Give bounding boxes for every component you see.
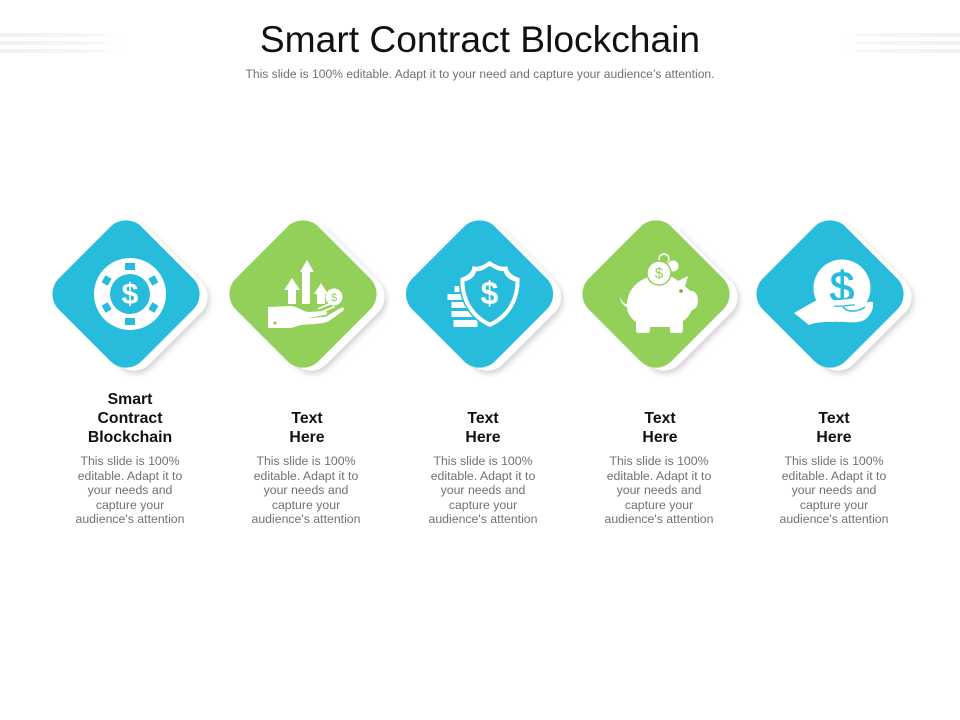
panel 4 diamond: piggy bank icon bbox=[573, 211, 749, 383]
heading 4: Text bbox=[644, 410, 676, 427]
panel 3 diamond: shield icon bbox=[397, 211, 572, 383]
text block 2: This slide is 100% bbox=[256, 454, 356, 468]
text block 4: audience's attention bbox=[604, 512, 714, 526]
text block 3: audience's attention bbox=[428, 512, 538, 526]
heading 1: Blockchain bbox=[88, 429, 172, 446]
text block 4: capture your bbox=[625, 498, 693, 512]
icon: hand and dollar coin bbox=[794, 260, 873, 325]
icon: shield and coin stack: $ bbox=[481, 275, 499, 311]
text block 5: capture your bbox=[800, 498, 868, 512]
icon: shield and coin stack bbox=[448, 261, 520, 327]
heading 4: Here bbox=[642, 429, 678, 446]
text block 2 bbox=[251, 454, 360, 526]
heading 3: Text bbox=[467, 410, 499, 427]
text block 3: your needs and bbox=[441, 483, 525, 497]
heading 1: Smart bbox=[108, 391, 152, 408]
text block 1: your needs and bbox=[88, 483, 172, 497]
text block 2: editable. Adapt it to bbox=[254, 468, 358, 482]
heading 3 bbox=[465, 410, 501, 446]
text block 1: audience's attention bbox=[75, 512, 184, 526]
heading 4 bbox=[642, 410, 678, 446]
icon: hand with growth arrows: $ bbox=[331, 292, 337, 304]
icon: dollar chip bbox=[94, 258, 166, 330]
text block 3 bbox=[428, 454, 538, 526]
heading 5: Text bbox=[818, 410, 850, 427]
text block 5: editable. Adapt it to bbox=[782, 468, 886, 482]
text block 5 bbox=[779, 454, 888, 526]
heading 1: Contract bbox=[98, 410, 162, 427]
icon: piggy bank with coins bbox=[620, 254, 698, 333]
heading 3: Here bbox=[465, 429, 501, 446]
text block 1: editable. Adapt it to bbox=[78, 468, 182, 482]
text block 3: capture your bbox=[449, 498, 517, 512]
panel 5 diamond: hand holding coin icon bbox=[747, 211, 923, 383]
text block 2: capture your bbox=[272, 498, 340, 512]
text block 1 bbox=[75, 454, 184, 526]
heading 2: Here bbox=[289, 429, 325, 446]
heading 2 bbox=[289, 410, 325, 446]
text block 4: This slide is 100% bbox=[609, 454, 709, 468]
title: Smart Contract Blockchain bbox=[260, 18, 700, 60]
text block 5: audience's attention bbox=[779, 512, 888, 526]
subtitle: This slide is 100% editable. Adapt it to your need and capture your audience’s attention. bbox=[245, 67, 715, 81]
text block 2: your needs and bbox=[264, 483, 348, 497]
text block 1: capture your bbox=[96, 498, 164, 512]
heading 5 bbox=[816, 410, 852, 446]
text block 1: This slide is 100% bbox=[80, 454, 180, 468]
text block 4: editable. Adapt it to bbox=[607, 468, 711, 482]
text block 4 bbox=[604, 454, 714, 526]
text block 2: audience's attention bbox=[251, 512, 360, 526]
icon: hand with growth arrows bbox=[268, 260, 344, 328]
icon: piggy bank with coins: $ bbox=[655, 265, 664, 282]
text block 3: This slide is 100% bbox=[433, 454, 533, 468]
text block 4: your needs and bbox=[617, 483, 701, 497]
text block 3: editable. Adapt it to bbox=[431, 468, 535, 482]
heading 5: Here bbox=[816, 429, 852, 446]
panel 2 diamond: hand with arrows icon bbox=[220, 211, 396, 383]
text block 5: your needs and bbox=[792, 483, 876, 497]
heading 2: Text bbox=[291, 410, 323, 427]
icon: dollar chip: $ bbox=[122, 278, 139, 311]
text block 5: This slide is 100% bbox=[784, 454, 884, 468]
panel 1 diamond: poker chip icon bbox=[43, 211, 219, 383]
heading 1 bbox=[88, 391, 172, 446]
icon: hand and dollar coin: $ bbox=[830, 263, 854, 312]
